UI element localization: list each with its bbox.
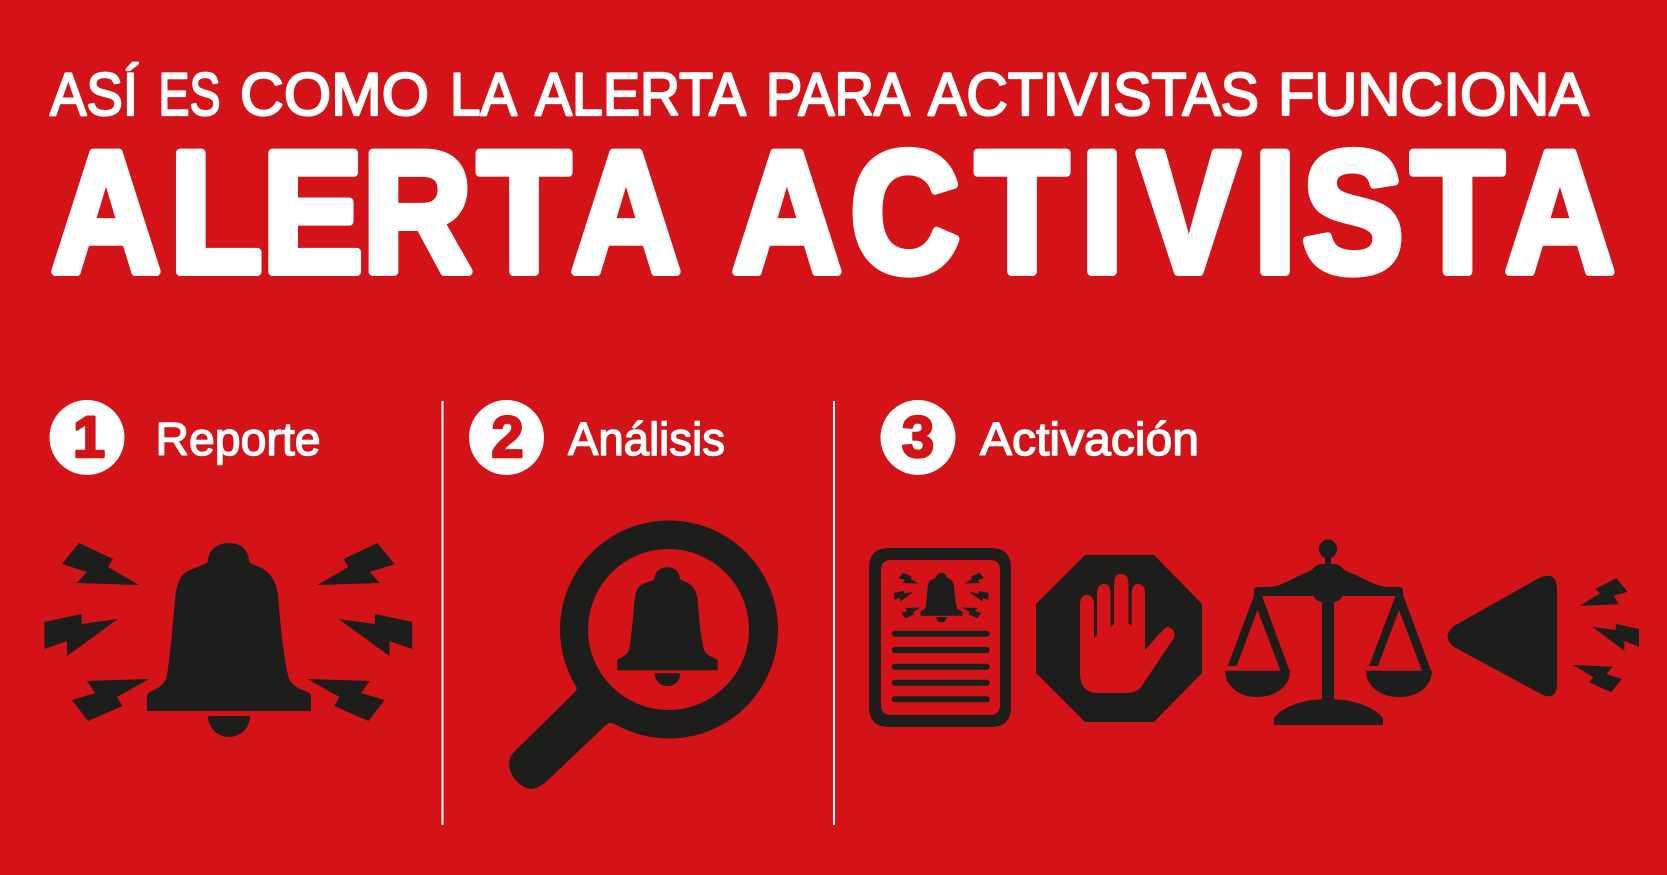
subtitle: ES <box>158 61 220 128</box>
divider 1 <box>442 401 444 825</box>
subtitle: ALERTA <box>535 61 746 128</box>
step 1 heading: Reporte <box>156 413 320 465</box>
subtitle: COMO <box>240 61 429 128</box>
icon: ringing bell <box>44 543 412 737</box>
icon: magnifying glass over bell <box>509 520 778 789</box>
icon: megaphone with sound bolts <box>1448 576 1639 696</box>
subtitle: PARA <box>766 61 910 128</box>
step 2 number badge <box>469 400 544 475</box>
main title: ALERTA ACTIVISTA <box>51 116 1615 309</box>
subtitle: LA <box>450 61 517 128</box>
step 1 number badge: 1 <box>73 405 105 470</box>
step 2 heading: Análisis <box>568 413 725 465</box>
icon: stop hand <box>1036 555 1202 722</box>
subtitle <box>50 61 1589 128</box>
subtitle: ACTIVISTAS <box>928 61 1259 128</box>
icon: alert document <box>869 548 1011 727</box>
icon: justice scales <box>1225 540 1432 725</box>
step 2 number badge: 2 <box>491 405 524 470</box>
step 3 heading: Activación <box>980 413 1199 465</box>
subtitle: ASÍ <box>50 61 138 128</box>
subtitle: FUNCIONA <box>1278 61 1589 128</box>
step 3 number badge: 3 <box>902 405 934 470</box>
step 1 number badge <box>50 400 124 475</box>
divider 2 <box>833 401 835 825</box>
step 3 number badge <box>880 400 956 475</box>
